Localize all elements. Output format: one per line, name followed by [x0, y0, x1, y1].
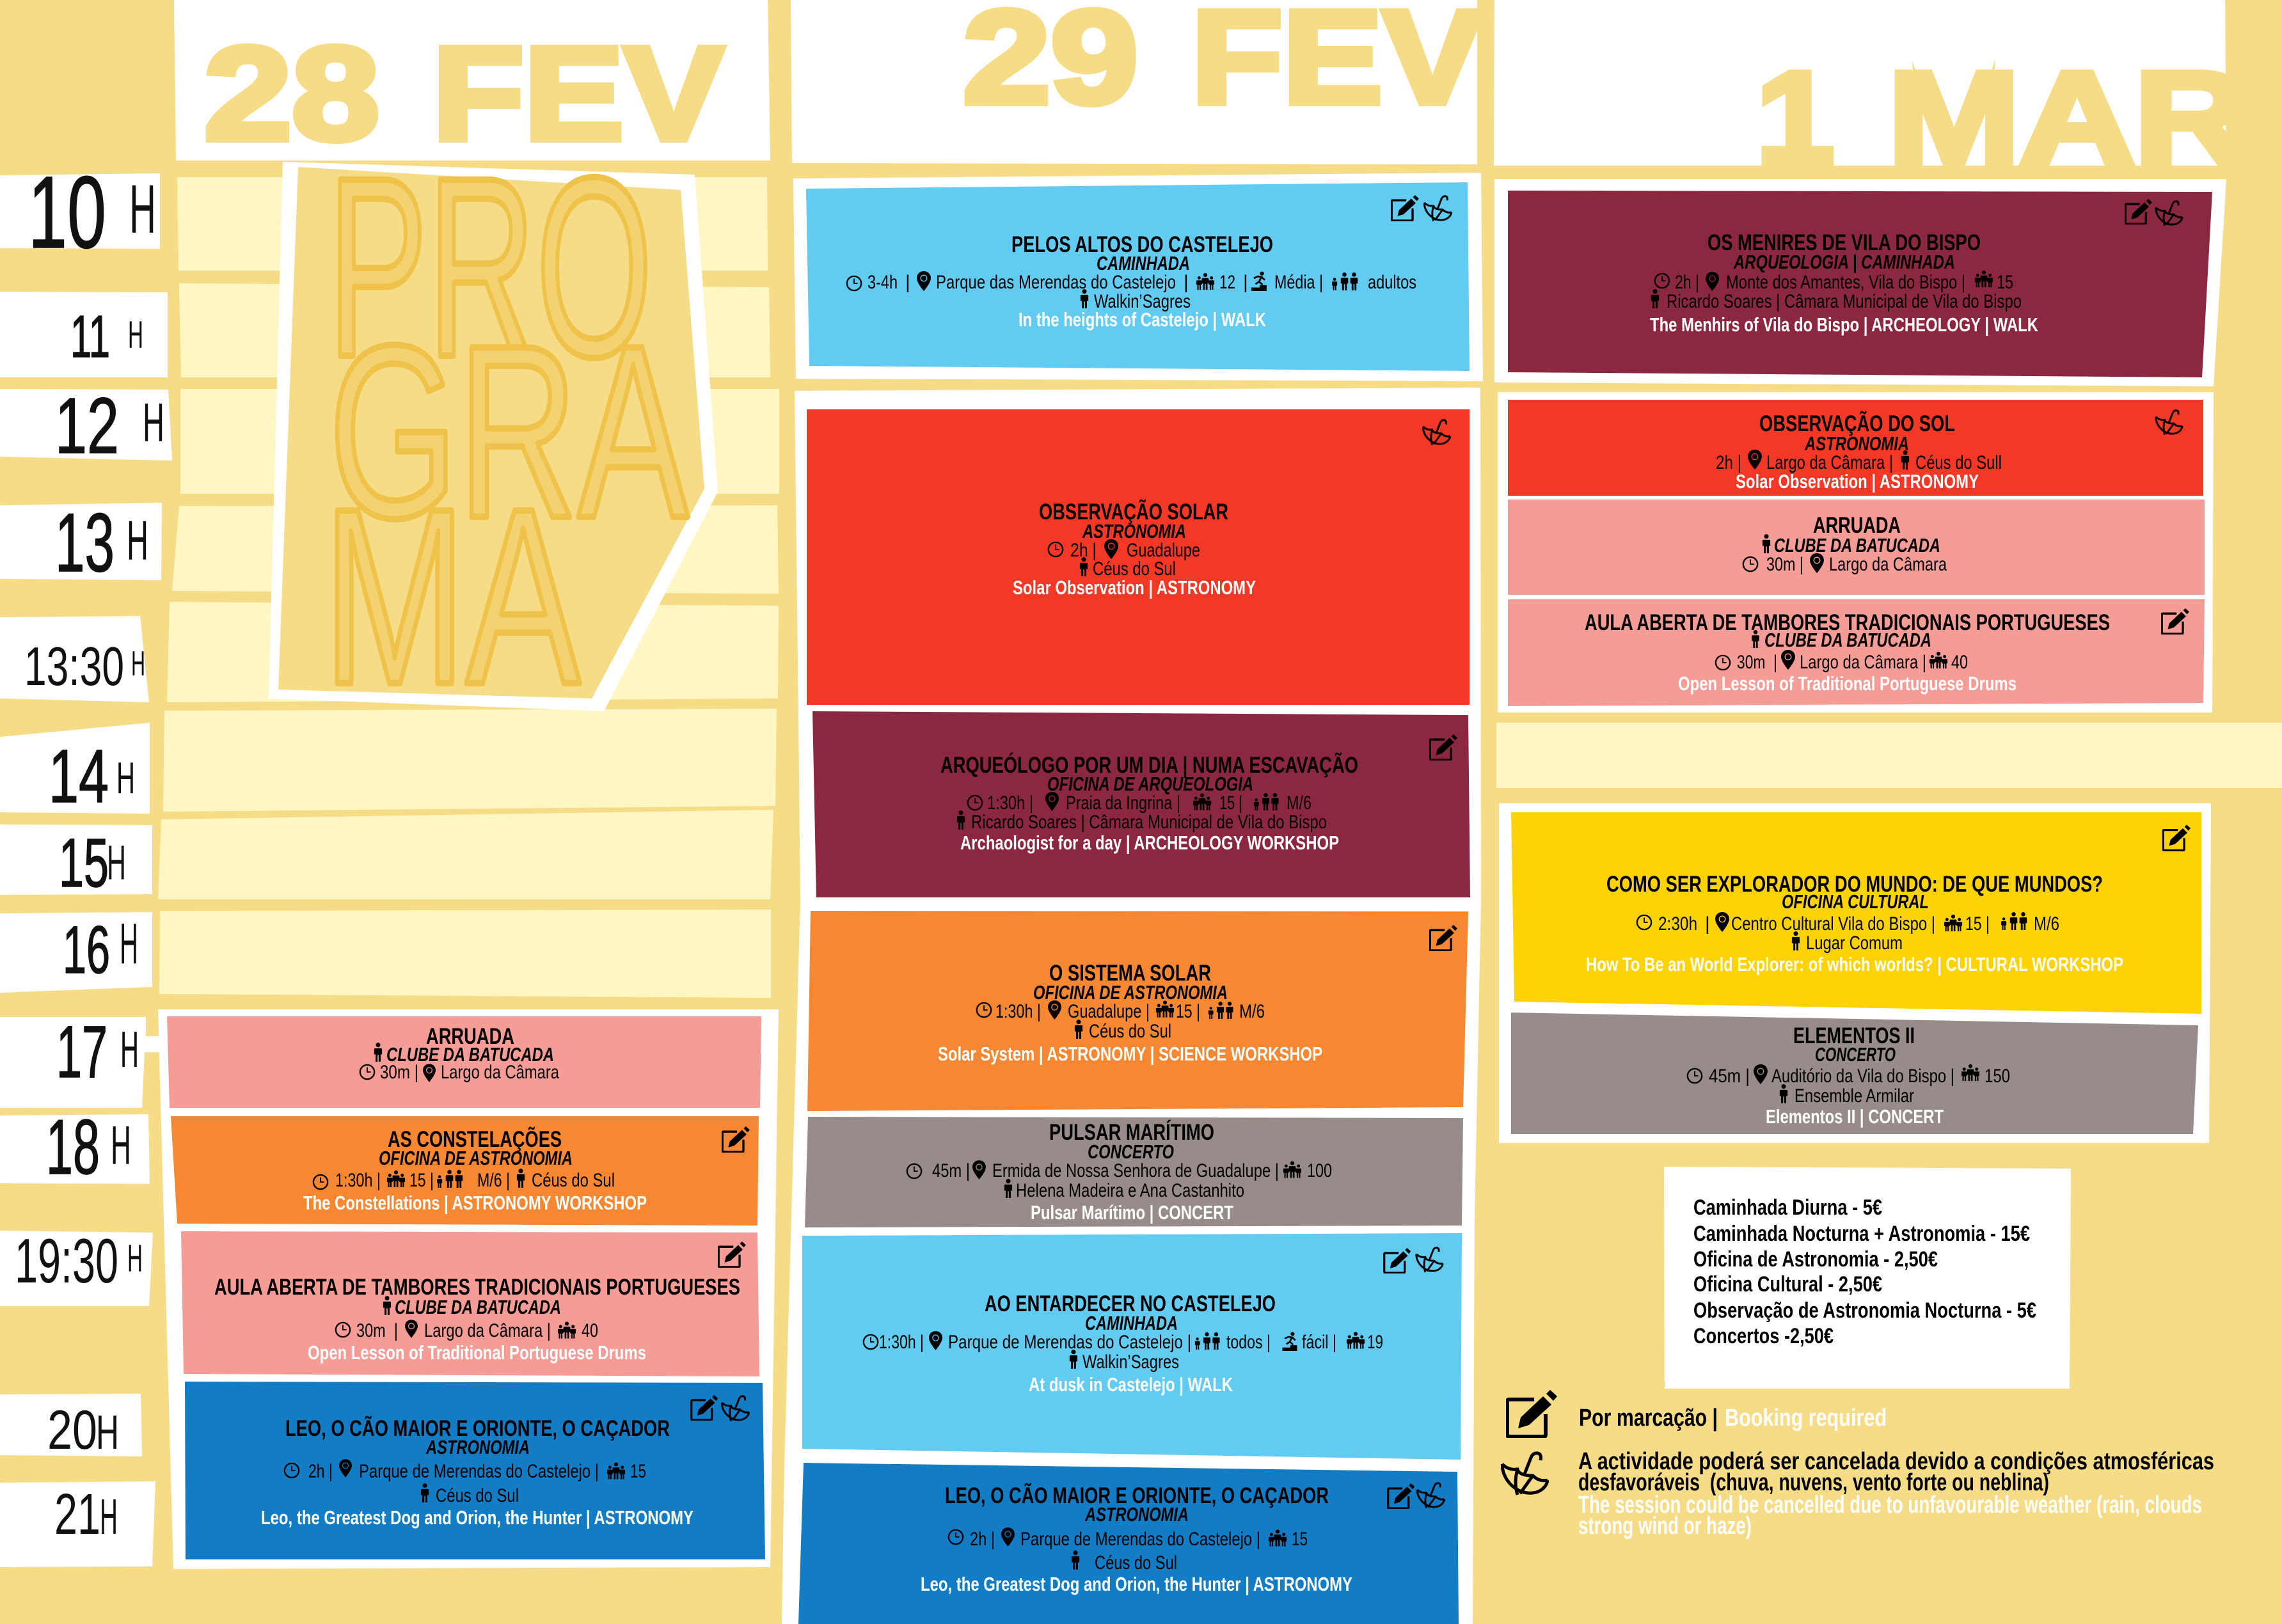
- card: As Constelações: The Constellations | ASTRONOMY WORKSHOP: [303, 1192, 647, 1214]
- card: Arqueólogo por um dia: ARQUEÓLOGO POR UM DIA | NUMA ESCAVAÇÃO: [940, 752, 1358, 778]
- card: Ao entardecer no Castelejo: Walkin’Sagres: [1082, 1352, 1179, 1373]
- card: Arqueólogo por um dia: 1:30h |: [987, 792, 1033, 814]
- hour label 18 H: 18: [46, 1103, 100, 1190]
- card: Arqueólogo por um dia: M/6: [1287, 792, 1311, 814]
- card: Pelos altos do Castelejo: [806, 182, 1470, 371]
- card: Elementos II: 150: [1985, 1066, 2010, 1087]
- card: Ao entardecer no Castelejo: CAMINHADA: [1085, 1312, 1178, 1334]
- card: Leo day 2: Parque de Merendas do Castelejo |: [1020, 1529, 1260, 1550]
- card: Pulsar Marítimo: [805, 1117, 1463, 1227]
- hour label 16 H: [0, 912, 152, 993]
- card: Pelos altos do Castelejo: Walkin’Sagres: [1094, 291, 1191, 312]
- card: Pulsar Marítimo: Pulsar Marítimo | CONCERT: [1031, 1201, 1233, 1224]
- card: Ao entardecer no Castelejo: todos |: [1226, 1332, 1271, 1353]
- card: As Constelações: AS CONSTELAÇÕES: [388, 1126, 562, 1152]
- card: Aula aberta day 3: AULA ABERTA DE TAMBORES TRADICIONAIS PORTUGUESES: [1585, 610, 2110, 635]
- card: Elementos II: ELEMENTOS II: [1793, 1023, 1915, 1048]
- card: Arruada day 1: 30m |: [380, 1062, 418, 1083]
- hour label 20 H: 20: [47, 1399, 97, 1461]
- hour label 16 H: H: [120, 912, 138, 976]
- hour label 11 H: H: [128, 313, 143, 356]
- card: Leo day 2: LEO, O CÃO MAIOR E ORIONTE, O CAÇADOR: [945, 1483, 1329, 1508]
- card: Leo day 1: [185, 1382, 765, 1559]
- card: O sistema solar: 15 |: [1176, 1001, 1200, 1022]
- hour label 19:30 H: H: [127, 1237, 143, 1280]
- panel: price list: Caminhada Nocturna + Astronomia - 15€: [1693, 1222, 2030, 1246]
- card: Pulsar Marítimo: Ermida de Nossa Senhora de Guadalupe |: [992, 1160, 1279, 1181]
- card: Como ser explorador do mundo: |: [1705, 913, 1710, 934]
- card: Os menires de Vila do Bispo: The Menhirs of Vila do Bispo | ARCHEOLOGY | WALK: [1650, 313, 2038, 336]
- hour label 17 H: H: [120, 1021, 139, 1078]
- hour label 13:30 H: [0, 616, 149, 702]
- panel: price list: Observação de Astronomia Nocturna - 5€: [1693, 1298, 2036, 1323]
- card: Ao entardecer no Castelejo: At dusk in Castelejo | WALK: [1029, 1373, 1233, 1396]
- card: Aula aberta day 3: Open Lesson of Traditional Portuguese Drums: [1678, 672, 2017, 695]
- panel: day 2 main white backing: [782, 388, 1481, 1624]
- hour label 17 H: 17: [56, 1011, 107, 1093]
- card: As Constelações: Céus do Sul: [532, 1170, 615, 1191]
- card: Elementos II: 45m |: [1709, 1066, 1750, 1087]
- card: O sistema solar: OFICINA DE ASTRONOMIA: [1033, 981, 1228, 1004]
- card: Os menires de Vila do Bispo: Monte dos Amantes, Vila do Bispo |: [1726, 272, 1965, 293]
- card: As Constelações: M/6 |: [477, 1170, 510, 1191]
- card: Pulsar Marítimo: 100: [1307, 1160, 1332, 1181]
- hour label 16 H: 16: [63, 913, 110, 988]
- card: Observação solar: OBSERVAÇÃO SOLAR: [1039, 500, 1228, 524]
- panel: price list: Oficina de Astronomia - 2,50€: [1693, 1247, 1938, 1272]
- card: As Constelações: 15 |: [409, 1170, 434, 1191]
- card: Pelos altos do Castelejo: In the heights of Castelejo | WALK: [1018, 308, 1266, 331]
- card: Aula aberta day 3: CLUBE DA BATUCADA: [1764, 629, 1931, 651]
- card: Ao entardecer no Castelejo: [802, 1233, 1462, 1460]
- card: O sistema solar: [807, 911, 1468, 1111]
- card: Observação do sol: Solar Observation | ASTRONOMY: [1736, 470, 1979, 493]
- card: O sistema solar: 1:30h |: [995, 1001, 1041, 1022]
- card: Pelos altos do Castelejo: PELOS ALTOS DO CASTELEJO: [1011, 232, 1273, 257]
- card: Pelos altos do Castelejo: |: [905, 272, 910, 293]
- card: Arruada day 3: Largo da Câmara: [1829, 554, 1947, 575]
- card: O sistema solar: Céus do Sul: [1089, 1021, 1171, 1042]
- card: Elementos II: Auditório da Vila do Bispo |: [1771, 1066, 1954, 1087]
- card: Leo day 2: 15: [1292, 1529, 1308, 1550]
- card: Observação do sol: OBSERVAÇÃO DO SOL: [1759, 411, 1955, 436]
- card: Aula aberta day 1: AULA ABERTA DE TAMBORES TRADICIONAIS PORTUGUESES: [214, 1275, 740, 1300]
- card: Observação solar: [807, 409, 1470, 705]
- hour label 21 H: [0, 1481, 155, 1567]
- card: Pulsar Marítimo: 45m |: [932, 1160, 970, 1181]
- card: Arruada day 3: [1508, 500, 2205, 595]
- card: Ao entardecer no Castelejo: 19: [1367, 1332, 1383, 1353]
- card: Aula aberta day 3: Largo da Câmara |: [1800, 652, 1926, 673]
- hour label 19:30 H: 19:30: [15, 1226, 118, 1296]
- hour label 10 H: 10: [28, 155, 106, 269]
- hour label 12 H: H: [143, 393, 164, 453]
- hour label 15 H: [0, 824, 152, 901]
- panel: day 3 midday white backing: [1498, 392, 2214, 713]
- card: As Constelações: [171, 1116, 759, 1226]
- hour label 13:30 H: 13:30: [24, 636, 124, 697]
- card: Ao entardecer no Castelejo: 1:30h |: [879, 1332, 924, 1353]
- header: 29 FEV: [791, 0, 1482, 164]
- panel: day 1 evening white backing: [158, 1009, 779, 1569]
- card: Ao entardecer no Castelejo: AO ENTARDECER NO CASTELEJO: [985, 1291, 1276, 1316]
- card: Como ser explorador do mundo: Lugar Comum: [1806, 933, 1903, 954]
- hour label 12 H: [0, 382, 172, 470]
- card: Leo day 1: ASTRONOMIA: [425, 1436, 530, 1458]
- hour label 10 H: H: [129, 170, 156, 248]
- header: 28 FEV: FEV: [432, 20, 724, 168]
- card: Os menires de Vila do Bispo: Ricardo Soares | Câmara Municipal de Vila do Bispo: [1667, 291, 2022, 312]
- card: Pulsar Marítimo: Helena Madeira e Ana Castanhito: [1016, 1180, 1244, 1201]
- card: Pelos altos do Castelejo: |: [1243, 272, 1248, 293]
- card: Pelos altos do Castelejo: 3-4h: [868, 272, 898, 293]
- card: Arruada day 1: CLUBE DA BATUCADA: [386, 1043, 554, 1066]
- card: Leo day 1: Céus do Sul: [436, 1485, 519, 1506]
- card: Aula aberta day 1: [181, 1231, 759, 1376]
- card: Leo day 2: 2h |: [970, 1529, 995, 1550]
- card: Observação solar: Solar Observation | ASTRONOMY: [1013, 576, 1256, 599]
- card: Aula aberta day 3: 30m |: [1737, 652, 1777, 673]
- card: Aula aberta day 1: 30m |: [356, 1320, 398, 1341]
- card: Como ser explorador do mundo: How To Be an World Explorer: of which worlds? | CULTURAL WORKSHOP: [1586, 953, 2123, 975]
- hour label 18 H: [0, 1103, 150, 1190]
- card: Leo day 1: 2h |: [308, 1461, 333, 1482]
- header: 28 FEV: 28: [204, 20, 379, 168]
- card: Os menires de Vila do Bispo: 2h |: [1675, 272, 1699, 293]
- card: As Constelações: 1:30h |: [335, 1170, 381, 1191]
- card: Leo day 2: Leo, the Greatest Dog and Orion, the Hunter | ASTRONOMY: [921, 1573, 1352, 1595]
- header: 1 MAR: MAR: [1888, 45, 2249, 191]
- card: Os menires de Vila do Bispo: OS MENIRES DE VILA DO BISPO: [1708, 230, 1981, 255]
- empty time slot strip, day 3: [1496, 723, 2282, 788]
- card: Arqueólogo por um dia: Archaologist for a day | ARCHEOLOGY WORKSHOP: [960, 832, 1339, 854]
- card: Leo day 2: Céus do Sul: [1095, 1552, 1177, 1573]
- card: Arqueólogo por um dia: OFICINA DE ARQUEOLOGIA: [1047, 773, 1253, 795]
- card: Arruada day 1: Largo da Câmara: [441, 1062, 559, 1083]
- card: Aula aberta day 1: Open Lesson of Traditional Portuguese Drums: [308, 1341, 646, 1364]
- card: Pelos altos do Castelejo: 12: [1219, 272, 1235, 293]
- card: Pelos altos do Castelejo: CAMINHADA: [1097, 252, 1190, 274]
- panel: price list: Concertos -2,50€: [1693, 1324, 1834, 1348]
- card: Elementos II: Ensemble Armilar: [1795, 1085, 1914, 1107]
- header: 1 MAR: [1494, 0, 2249, 191]
- panel: price list: [1664, 1167, 2071, 1389]
- card: O sistema solar: Solar System | ASTRONOMY | SCIENCE WORKSHOP: [938, 1043, 1322, 1065]
- card: Como ser explorador do mundo: M/6: [2034, 913, 2059, 934]
- legend: booking required: Por marcação |: [1579, 1405, 1718, 1431]
- card: Arqueólogo por um dia: 15 |: [1219, 792, 1242, 814]
- legend: weather cancellation: [1502, 1448, 2214, 1540]
- legend: weather cancellation: desfavoráveis (chuva, nuvens, vento forte ou neblina): [1578, 1469, 2049, 1496]
- card: Leo day 1: 15: [630, 1461, 646, 1482]
- panel: programa title: MA: [323, 457, 581, 737]
- hour label 17 H: [0, 1011, 160, 1108]
- card: Observação solar: ASTRONOMIA: [1082, 520, 1186, 542]
- hour label 13 H: 13: [55, 496, 115, 589]
- card: Como ser explorador do mundo: COMO SER EXPLORADOR DO MUNDO: DE QUE MUNDOS?: [1606, 872, 2103, 897]
- hour label 14 H: 14: [49, 734, 109, 819]
- panel: programa title: [269, 124, 718, 737]
- panel: day 2 morning white backing: [793, 173, 1483, 381]
- card: Arqueólogo por um dia: [812, 711, 1470, 897]
- hour label 13 H: [0, 496, 162, 589]
- legend: booking required: Booking required: [1725, 1405, 1887, 1431]
- card: O sistema solar: O SISTEMA SOLAR: [1049, 961, 1211, 986]
- card: Elementos II: [1511, 1013, 2198, 1134]
- card: Aula aberta day 1: CLUBE DA BATUCADA: [395, 1296, 561, 1318]
- card: Arruada day 3: CLUBE DA BATUCADA: [1774, 534, 1940, 556]
- card: Como ser explorador do mundo: 15 |: [1965, 913, 1990, 934]
- card: O sistema solar: M/6: [1239, 1001, 1265, 1022]
- card: Pulsar Marítimo: CONCERTO: [1088, 1140, 1174, 1163]
- card: Como ser explorador do mundo: Centro Cultural Vila do Bispo |: [1731, 913, 1935, 934]
- panel: price list: Caminhada Diurna - 5€: [1693, 1195, 1882, 1220]
- card: Observação do sol: [1508, 400, 2203, 496]
- card: Como ser explorador do mundo: 2:30h: [1658, 913, 1697, 934]
- card: Leo day 2: [798, 1463, 1459, 1624]
- card: Aula aberta day 1: Largo da Câmara |: [424, 1320, 551, 1341]
- card: Observação do sol: Céus do Sull: [1915, 452, 2002, 473]
- card: Arruada day 1: ARRUADA: [426, 1024, 514, 1049]
- card: Leo day 2: ASTRONOMIA: [1084, 1503, 1189, 1525]
- hour label 13 H: H: [127, 510, 148, 572]
- card: Pelos altos do Castelejo: Média |: [1274, 272, 1323, 293]
- header: 1 MAR: 1: [1756, 45, 1834, 191]
- card: Observação solar: Céus do Sul: [1093, 558, 1176, 579]
- hour label 18 H: H: [111, 1116, 131, 1176]
- card: Elementos II: CONCERTO: [1815, 1043, 1896, 1066]
- card: Ao entardecer no Castelejo: Parque de Merendas do Castelejo |: [948, 1332, 1191, 1353]
- hour label 11 H: [0, 292, 168, 377]
- card: Aula aberta day 3: [1508, 599, 2205, 706]
- panel: programa title: PRO: [328, 124, 653, 410]
- hour label 13:30 H: H: [131, 643, 145, 683]
- card: Leo day 1: Leo, the Greatest Dog and Orion, the Hunter | ASTRONOMY: [261, 1506, 693, 1529]
- empty time slots, day 1: [158, 177, 779, 998]
- card: Pelos altos do Castelejo: Parque das Merendas do Castelejo: [936, 272, 1176, 293]
- legend: weather cancellation: strong wind or haze): [1578, 1513, 1752, 1540]
- panel: day 3 morning white backing: [1494, 179, 2226, 386]
- card: Como ser explorador do mundo: OFICINA CULTURAL: [1782, 890, 1929, 913]
- header: 28 FEV: [174, 0, 770, 168]
- panel: price list: Oficina Cultural - 2,50€: [1693, 1272, 1882, 1297]
- card: Leo day 1: Parque de Merendas do Castelejo |: [359, 1461, 599, 1482]
- hour label 14 H: H: [116, 753, 135, 803]
- card: Os menires de Vila do Bispo: [1508, 191, 2212, 377]
- hour label 21 H: 21: [54, 1483, 100, 1547]
- card: Pelos altos do Castelejo: adultos: [1368, 272, 1416, 293]
- card: Pulsar Marítimo: PULSAR MARÍTIMO: [1049, 1119, 1214, 1145]
- card: Arruada day 1: [167, 1016, 761, 1108]
- card: Arqueólogo por um dia: Ricardo Soares | Câmara Municipal de Vila do Bispo: [971, 812, 1327, 833]
- card: O sistema solar: Guadalupe |: [1068, 1001, 1150, 1022]
- card: Ao entardecer no Castelejo: fácil |: [1302, 1332, 1336, 1353]
- card: Elementos II: Elementos II | CONCERT: [1766, 1105, 1944, 1128]
- card: Os menires de Vila do Bispo: 15: [1997, 272, 2013, 293]
- hour label 21 H: H: [100, 1488, 118, 1545]
- card: Observação do sol: 2h |: [1716, 452, 1741, 473]
- hour label 15 H: H: [107, 836, 126, 890]
- hour label 15 H: 15: [59, 824, 109, 901]
- card: Aula aberta day 1: 40: [582, 1320, 598, 1341]
- card: Aula aberta day 3: 40: [1951, 652, 1968, 673]
- card: Observação solar: 2h |: [1070, 540, 1097, 561]
- card: Leo day 1: LEO, O CÃO MAIOR E ORIONTE, O CAÇADOR: [285, 1416, 670, 1441]
- hour label 20 H: [0, 1394, 142, 1461]
- card: Como ser explorador do mundo: [1511, 812, 2201, 1014]
- card: Observação do sol: Largo da Câmara |: [1766, 452, 1893, 473]
- card: Pelos altos do Castelejo: |: [1184, 272, 1189, 293]
- card: Arruada day 3: 30m |: [1766, 554, 1803, 575]
- hour label 20 H: H: [96, 1405, 119, 1459]
- hour label 14 H: [0, 723, 150, 819]
- legend: booking required: [1507, 1390, 1887, 1437]
- hour label 12 H: 12: [55, 382, 119, 470]
- card: Os menires de Vila do Bispo: ARQUEOLOGIA | CAMINHADA: [1733, 251, 1955, 273]
- panel: programa title: GRA: [329, 294, 689, 569]
- card: Observação do sol: ASTRONOMIA: [1804, 432, 1909, 455]
- card: Arqueólogo por um dia: Praia da Ingrina |: [1066, 792, 1180, 814]
- card: As Constelações: OFICINA DE ASTRONOMIA: [379, 1147, 573, 1169]
- hour label 11 H: 11: [70, 303, 110, 370]
- card: Observação solar: Guadalupe: [1127, 540, 1200, 561]
- card: Arruada day 3: ARRUADA: [1813, 513, 1901, 538]
- panel: day 3 afternoon white backing: [1499, 803, 2211, 1143]
